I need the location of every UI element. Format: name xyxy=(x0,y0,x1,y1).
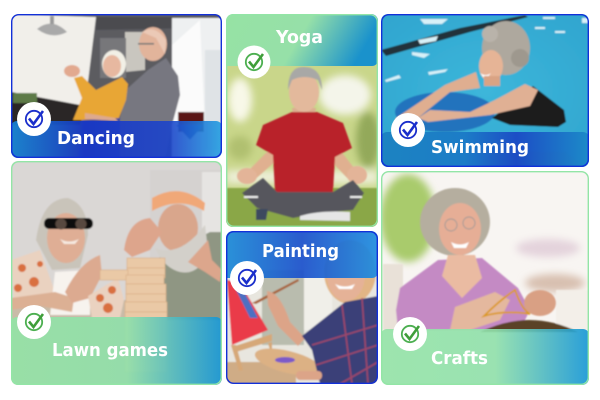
icon: blue check badge xyxy=(230,261,264,295)
banner: Swimming xyxy=(381,132,589,167)
banner: Dancing xyxy=(11,121,222,158)
panel: Swimming xyxy=(381,14,589,167)
panel: Painting xyxy=(226,231,378,384)
banner: Yoga xyxy=(226,14,378,66)
icon: green check badge xyxy=(393,317,427,351)
panel border: Swimming xyxy=(382,15,588,166)
label: Painting: Painting xyxy=(262,242,339,262)
label: Crafts: Crafts xyxy=(431,349,488,369)
banner: Crafts xyxy=(381,329,589,385)
label: Lawn games: Lawn games xyxy=(52,341,168,361)
photo: woman making a wreath xyxy=(382,172,588,332)
label: Yoga: Yoga xyxy=(275,28,323,48)
panel border: Dancing xyxy=(12,15,221,157)
panel: Crafts xyxy=(380,171,589,385)
photo: couple playing block tower game xyxy=(11,161,222,385)
panel: Dancing xyxy=(11,14,222,158)
banner: Painting xyxy=(226,231,378,278)
panel border: Painting xyxy=(227,232,377,383)
label: Dancing: Dancing xyxy=(57,129,135,149)
panel border: Yoga xyxy=(227,15,377,226)
icon: green check badge xyxy=(238,46,270,78)
photo: man meditating xyxy=(226,60,380,230)
man xyxy=(164,231,221,319)
panel border: Lawn games xyxy=(12,162,221,384)
panel border: Crafts xyxy=(382,172,588,384)
icon: blue check badge xyxy=(17,102,51,136)
woman xyxy=(73,76,128,120)
photo: couple dancing xyxy=(11,14,222,158)
woman xyxy=(36,198,88,270)
photo: woman painting on canvas xyxy=(226,231,378,384)
tower xyxy=(99,256,168,319)
panel: Yoga xyxy=(226,14,380,230)
label: Swimming: Swimming xyxy=(431,138,529,158)
icon: blue check badge xyxy=(391,113,425,147)
icon: green check badge xyxy=(17,305,51,339)
banner: Lawn games xyxy=(11,317,222,385)
photo: woman swimming xyxy=(381,14,589,167)
panel: Lawn games xyxy=(11,161,222,385)
man xyxy=(120,58,181,121)
